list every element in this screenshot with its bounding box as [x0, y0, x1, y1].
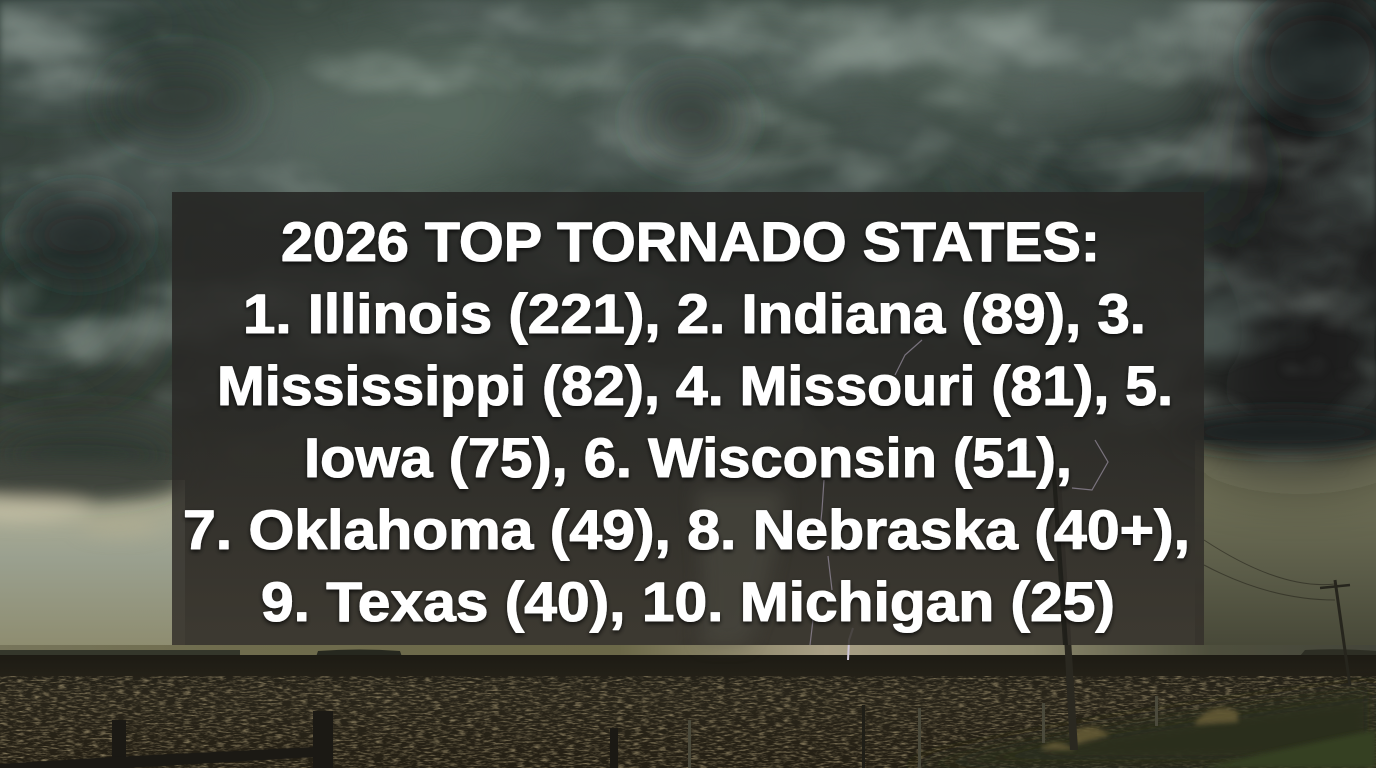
tornado visible through panel — [695, 490, 785, 645]
lightning through panel — [810, 340, 1108, 645]
line: ranks 7 to 8: 7. Oklahoma (49), 8. Nebraska (40+), — [183, 498, 1190, 561]
fence posts right — [688, 696, 1158, 768]
line: ranks 5 to 6: Iowa (75), 6. Wisconsin (51), — [304, 426, 1072, 489]
text block: tornado state ranking — [183, 210, 1190, 633]
line: ranks 3 to 5: Mississippi (82), 4. Missouri (81), 5. — [217, 354, 1173, 417]
tornado funnel — [680, 480, 790, 658]
line: ranks 9 to 10: 9. Texas (40), 10. Michigan (25) — [261, 570, 1115, 633]
grassy verge — [900, 688, 1376, 768]
lightning bolt — [848, 628, 853, 660]
ploughed field — [0, 655, 1376, 768]
pole through panel — [1050, 445, 1068, 645]
line: ranks 1 to 3: 1. Illinois (221), 2. Indiana (89), 3. — [243, 282, 1146, 345]
heading: 2026 TOP TORNADO STATES: — [281, 210, 1100, 273]
panel: translucent dark backing — [172, 192, 1204, 645]
cloud texture — [0, 0, 1376, 480]
fence left — [0, 711, 618, 768]
far utility pole — [1204, 540, 1350, 686]
near utility pole — [1056, 480, 1078, 750]
horizon glow and treeline — [0, 645, 1376, 657]
